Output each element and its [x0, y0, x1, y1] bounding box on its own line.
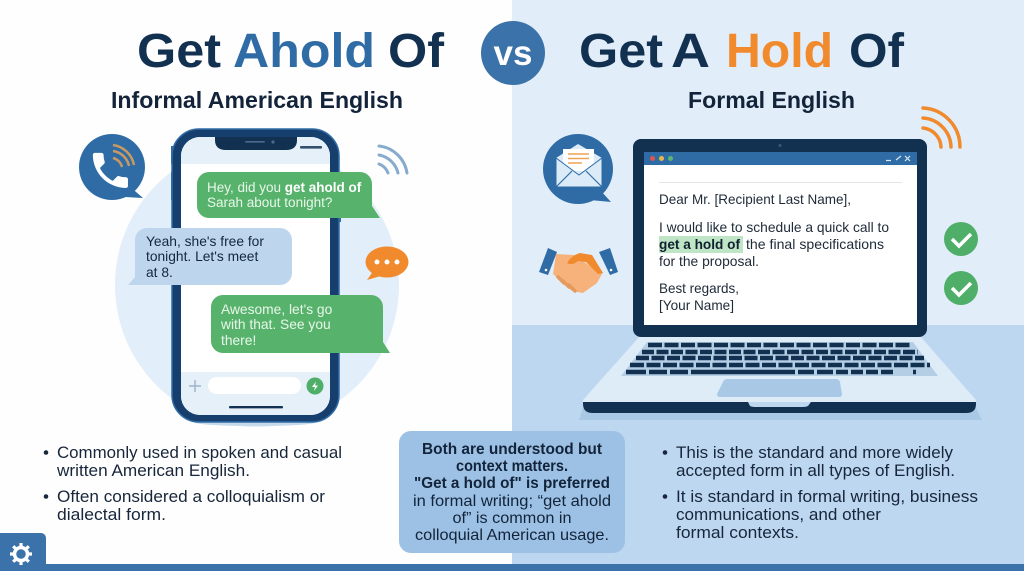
keyboard	[621, 342, 938, 376]
bottom bar	[0, 564, 1024, 571]
title: get a hold of: Get	[579, 25, 663, 78]
input field	[208, 377, 301, 394]
text block: formal notes: accepted form in all types of English.	[676, 462, 955, 480]
subheading: formal: Formal English	[688, 87, 855, 113]
text block: formal notes: communications, and other	[676, 506, 882, 524]
touchpad	[717, 379, 842, 397]
icon: handshake	[539, 248, 618, 293]
email text: Best regards,	[659, 280, 739, 296]
icon: phone call bubble	[79, 134, 145, 200]
email text: [Your Name]	[659, 297, 734, 313]
email text: the final specifications	[746, 236, 884, 252]
plus icon	[189, 380, 201, 392]
callout: context matters: of” is common in	[452, 510, 572, 527]
send button	[306, 378, 324, 394]
title: get ahold of: Get	[137, 25, 221, 78]
phone	[171, 129, 341, 422]
title: get a hold of: A	[671, 25, 710, 78]
icon: envelope bubble	[543, 134, 613, 204]
callout: context matters: in formal writing; “get ahold	[413, 493, 611, 510]
icon: blue signal waves	[379, 146, 407, 173]
title: get ahold of	[137, 25, 445, 78]
text block: formal notes: This is the standard and more widely	[676, 444, 954, 462]
icon: orange chat bubble	[366, 246, 408, 280]
title: get a hold of	[579, 25, 905, 78]
text block: informal notes: dialectal form.	[57, 505, 166, 524]
title: get a hold of: Of	[849, 25, 905, 78]
bubble: second green message	[211, 295, 390, 353]
keyword highlight	[659, 236, 743, 253]
text block: informal notes: Commonly used in spoken and casual	[57, 443, 342, 462]
title: get a hold of: Hold	[726, 25, 833, 78]
bubble: blue reply	[128, 228, 292, 285]
icon: check one	[944, 222, 978, 256]
bubble: first green message: Hey, did you get ahold of	[207, 180, 361, 195]
email text: for the proposal.	[659, 253, 759, 269]
icon: check two	[944, 271, 978, 305]
backdrop circle	[115, 143, 399, 427]
bubble: first green message	[197, 172, 380, 218]
laptop base edge	[583, 402, 976, 413]
email text: get a hold of	[659, 236, 740, 252]
vs badge: vs	[494, 34, 532, 73]
laptop shadow	[579, 408, 982, 420]
callout: context matters: context matters.	[456, 458, 568, 475]
title: get ahold of: Of	[388, 25, 445, 78]
vs badge	[481, 21, 545, 85]
phone shadow	[193, 418, 317, 426]
callout: context matters: "Get a hold of" is preferred	[414, 475, 610, 492]
panel: formal background	[512, 0, 1024, 565]
window title bar	[644, 152, 917, 165]
text block: informal notes: written American English.	[56, 461, 250, 480]
email text: I would like to schedule a quick call to	[659, 219, 889, 235]
bubble: second green message: Awesome, let's go	[221, 302, 333, 317]
bubble: blue reply: tonight. Let's meet	[146, 249, 258, 264]
laptop	[579, 139, 982, 420]
title: get ahold of: Ahold	[233, 25, 375, 78]
email text	[659, 191, 889, 313]
text block: informal notes	[44, 443, 342, 524]
screen	[644, 152, 917, 325]
text block: formal notes	[663, 444, 978, 542]
text block: formal notes: It is standard in formal writing, business	[676, 488, 978, 506]
callout: context matters: colloquial American usage.	[415, 527, 609, 544]
bubble: blue reply: Yeah, she's free for	[146, 234, 264, 249]
laptop lid	[633, 139, 927, 337]
bubble: blue reply: at 8.	[146, 265, 173, 280]
callout: context matters	[399, 431, 625, 553]
icon: settings gear tab	[0, 533, 46, 565]
bubble: second green message: with that. See you	[220, 317, 331, 332]
text block: informal notes: Often considered a colloquialism or	[57, 487, 325, 506]
laptop deck	[583, 336, 976, 406]
icon: orange signal waves	[923, 108, 960, 147]
bubble: second green message: there!	[221, 333, 256, 348]
subheading: informal: Informal American English	[111, 87, 403, 113]
email text: Dear Mr. [Recipient Last Name],	[659, 191, 851, 207]
callout: context matters: Both are understood but	[422, 441, 603, 458]
bubble: first green message: Sarah about tonight?	[207, 195, 332, 210]
text block: formal notes: formal contexts.	[676, 524, 799, 542]
